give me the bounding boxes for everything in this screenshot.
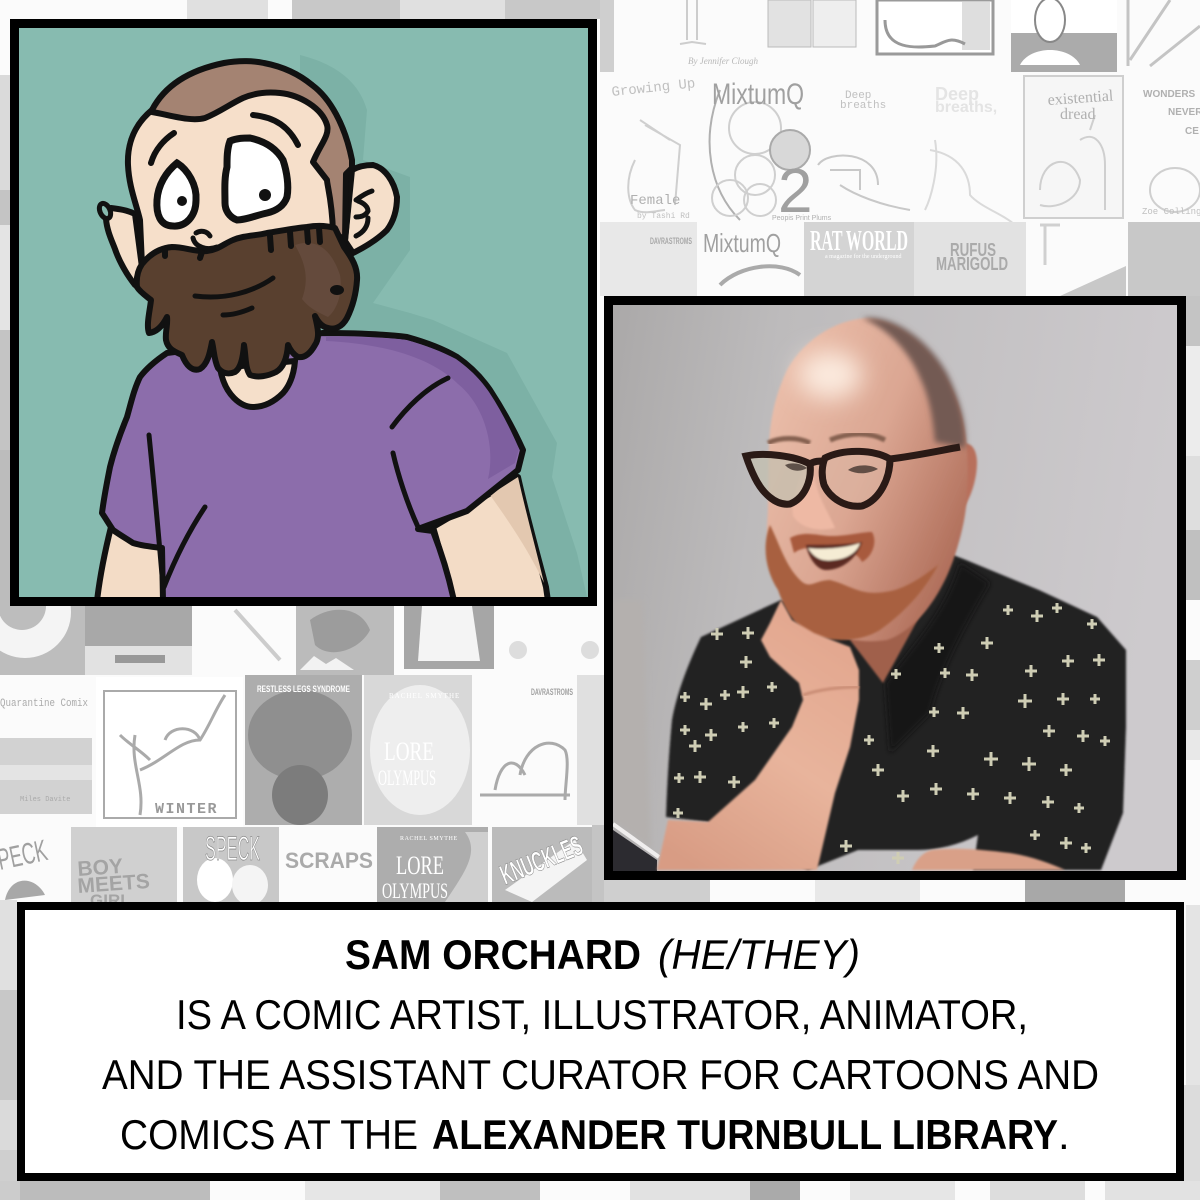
photo nose: [793, 476, 834, 530]
photo hair: [862, 318, 965, 448]
cartoon arms: [97, 477, 548, 601]
cover titles: RAT WORLD: [810, 226, 908, 257]
cover titles: RUFUS: [950, 240, 996, 260]
cartoon background shadow: [300, 55, 587, 597]
wall corner: [613, 600, 651, 850]
cover titles: a magazine for the underground: [825, 253, 902, 260]
cover titles: [0, 56, 1200, 910]
cover titles: 2: [778, 157, 812, 226]
caption line 2: IS A COMIC ARTIST, ILLUSTRATOR, ANIMATOR,: [176, 991, 1028, 1038]
cartoon shirt shading: [326, 337, 519, 479]
shirt plus pattern: [673, 603, 1110, 864]
panel: cartoon portrait: [14, 24, 592, 602]
caption line 4: [120, 1111, 1070, 1158]
photo beard: [766, 525, 938, 640]
cover titles: Growing Up: [611, 76, 696, 101]
photo mouth: [806, 542, 862, 570]
cartoon arm shading: [490, 477, 544, 583]
cover titles: LORE: [384, 737, 434, 766]
photo eyebrows: [768, 434, 885, 443]
cartoon beard highlight: [295, 243, 341, 317]
cartoon smile: [195, 278, 273, 315]
cover titles: Deep: [845, 90, 871, 102]
cover titles: WINTER: [155, 801, 218, 818]
cover titles: OLYMPUS: [378, 765, 436, 790]
cover titles: breaths,: [935, 99, 997, 116]
caption line 3: AND THE ASSISTANT CURATOR FOR CARTOONS AND: [102, 1051, 1099, 1098]
cover titles: DAVRASTROMS: [650, 236, 692, 246]
cover titles: by Tashi Rd: [637, 212, 690, 221]
caption line 4: .: [1058, 1111, 1070, 1158]
cartoon nose: [193, 231, 217, 249]
cover titles: Zoe Colling: [1142, 207, 1200, 217]
cartoon hair: [152, 61, 352, 240]
photo lower arm: [912, 849, 1065, 870]
cartoon head: [124, 79, 352, 258]
cover titles: By Jennifer Clough: [688, 56, 758, 66]
cover titles: Peopis Print Plums: [772, 215, 832, 222]
cartoon neck: [220, 361, 295, 407]
cover titles: RACHEL SMYTHE: [389, 692, 460, 700]
photo head: [767, 318, 968, 641]
shirt folds: [149, 378, 448, 587]
cover titles: OLYMPUS: [382, 878, 448, 903]
cover titles: Miles Davite: [20, 796, 70, 804]
cover titles: MixtumQ: [712, 78, 804, 111]
cartoon right ear: [345, 165, 397, 253]
photo arm and hand: [657, 600, 859, 870]
cartoon eyebrows: [151, 115, 298, 163]
cover titles: CE: [1185, 126, 1199, 137]
cover titles: SPECK: [205, 830, 260, 868]
cover titles: MixtumQ: [703, 228, 781, 258]
photo right ear: [965, 442, 978, 506]
cartoon beard top notches: [165, 228, 320, 258]
photo glasses: [746, 447, 960, 506]
top right covers row: [600, 0, 1200, 72]
cover titles: KNUCKLES: [496, 830, 587, 891]
forehead highlight: [798, 351, 862, 399]
cartoon beard: [137, 226, 357, 376]
photo moustache: [790, 532, 874, 562]
cover titles: MARIGOLD: [936, 254, 1008, 274]
caption line 1: SAM ORCHARD: [345, 931, 641, 978]
cover titles: DAVRASTROMS: [531, 687, 573, 697]
panel: photo portrait: [608, 300, 1182, 876]
left under-panel covers: [0, 566, 604, 905]
cartoon eyes: [157, 138, 288, 226]
cartoon left ear: [97, 202, 143, 285]
caption line 1: (HE/THEY): [658, 931, 860, 978]
cartoon shirt: [102, 333, 523, 601]
middle right covers row: [628, 76, 1200, 225]
panel: caption: [21, 906, 1180, 1177]
caption line 1: [345, 931, 860, 978]
cover titles: SCRAPS: [285, 848, 373, 873]
cover titles: existential: [1047, 87, 1114, 109]
cover titles: RESTLESS LEGS SYNDROME: [257, 684, 350, 694]
cover titles: LORE: [396, 851, 444, 880]
caption line 4: ALEXANDER TURNBULL LIBRARY: [432, 1111, 1058, 1158]
caption line 4: COMICS AT THE: [120, 1111, 418, 1158]
photo wrist crease: [803, 687, 859, 695]
cartoon pupils: [177, 189, 271, 206]
cover titles: Deep: [935, 84, 979, 104]
photo shirt: [666, 553, 1126, 870]
photo eyes: [785, 463, 878, 473]
cover titles: breaths: [840, 100, 886, 112]
cover titles: BOY: [77, 855, 124, 881]
cover titles: Female: [630, 193, 680, 209]
photo neck: [850, 616, 921, 684]
cover titles: MEETS: [77, 870, 151, 898]
cover titles: WONDERS: [1143, 89, 1196, 100]
cover titles: RACHEL SMYTHE: [400, 836, 458, 842]
lower right covers row: [600, 222, 1200, 296]
cover titles: GIRL: [90, 891, 131, 910]
cover titles: dread: [1060, 106, 1096, 123]
cover titles: Quarantine Comix: [0, 698, 88, 710]
